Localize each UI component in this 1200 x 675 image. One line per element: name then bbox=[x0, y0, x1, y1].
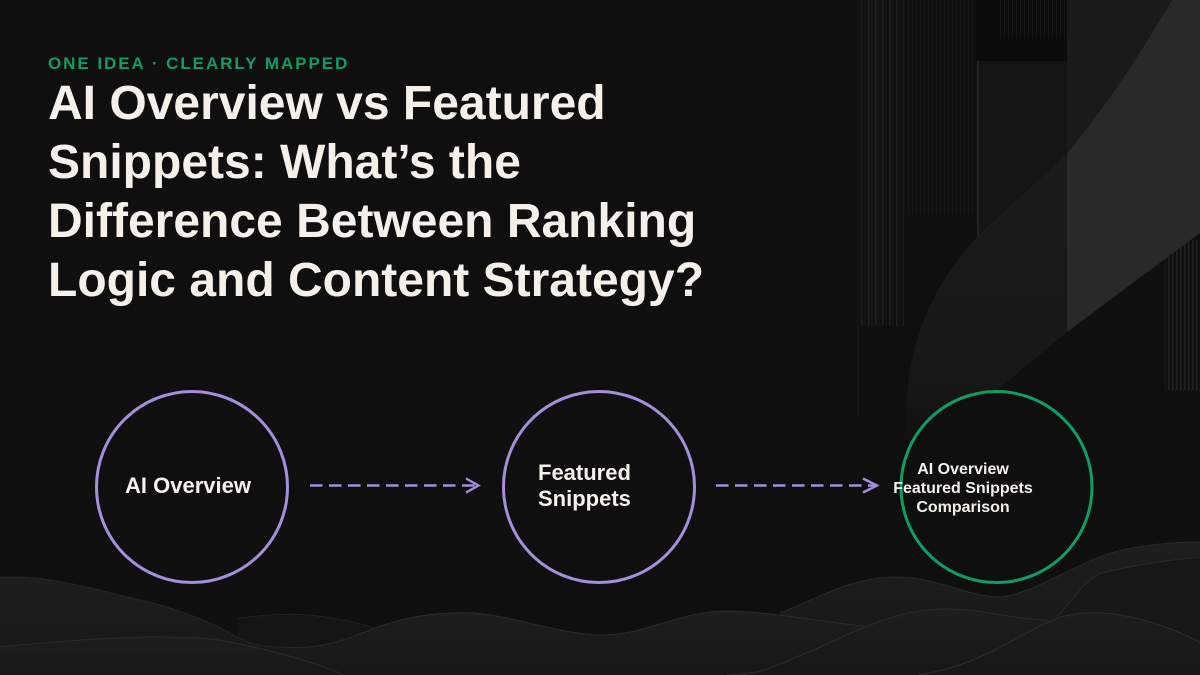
node: comparison: Featured Snippets bbox=[893, 480, 1033, 497]
eyebrow: ONE IDEA · CLEARLY MAPPED bbox=[48, 54, 349, 73]
arrow: AI Overview to Featured Snippets bbox=[310, 478, 478, 492]
node: comparison: AI Overview bbox=[917, 461, 1009, 478]
title: AI Overview vs Featured bbox=[48, 77, 606, 130]
node: comparison: Comparison bbox=[916, 499, 1010, 516]
title: Snippets: What’s the bbox=[48, 136, 521, 189]
node: Featured Snippets: Snippets bbox=[538, 486, 631, 511]
title bbox=[48, 77, 704, 307]
node: Featured Snippets: Featured bbox=[538, 460, 631, 485]
node: comparison bbox=[893, 392, 1092, 582]
node: AI Overview bbox=[96, 392, 288, 582]
node: AI Overview: AI Overview bbox=[125, 473, 252, 498]
node: Featured Snippets bbox=[504, 392, 694, 582]
title: Logic and Content Strategy? bbox=[48, 254, 704, 307]
arrow: Featured Snippets to comparison bbox=[716, 478, 877, 492]
title: Difference Between Ranking bbox=[48, 195, 696, 248]
